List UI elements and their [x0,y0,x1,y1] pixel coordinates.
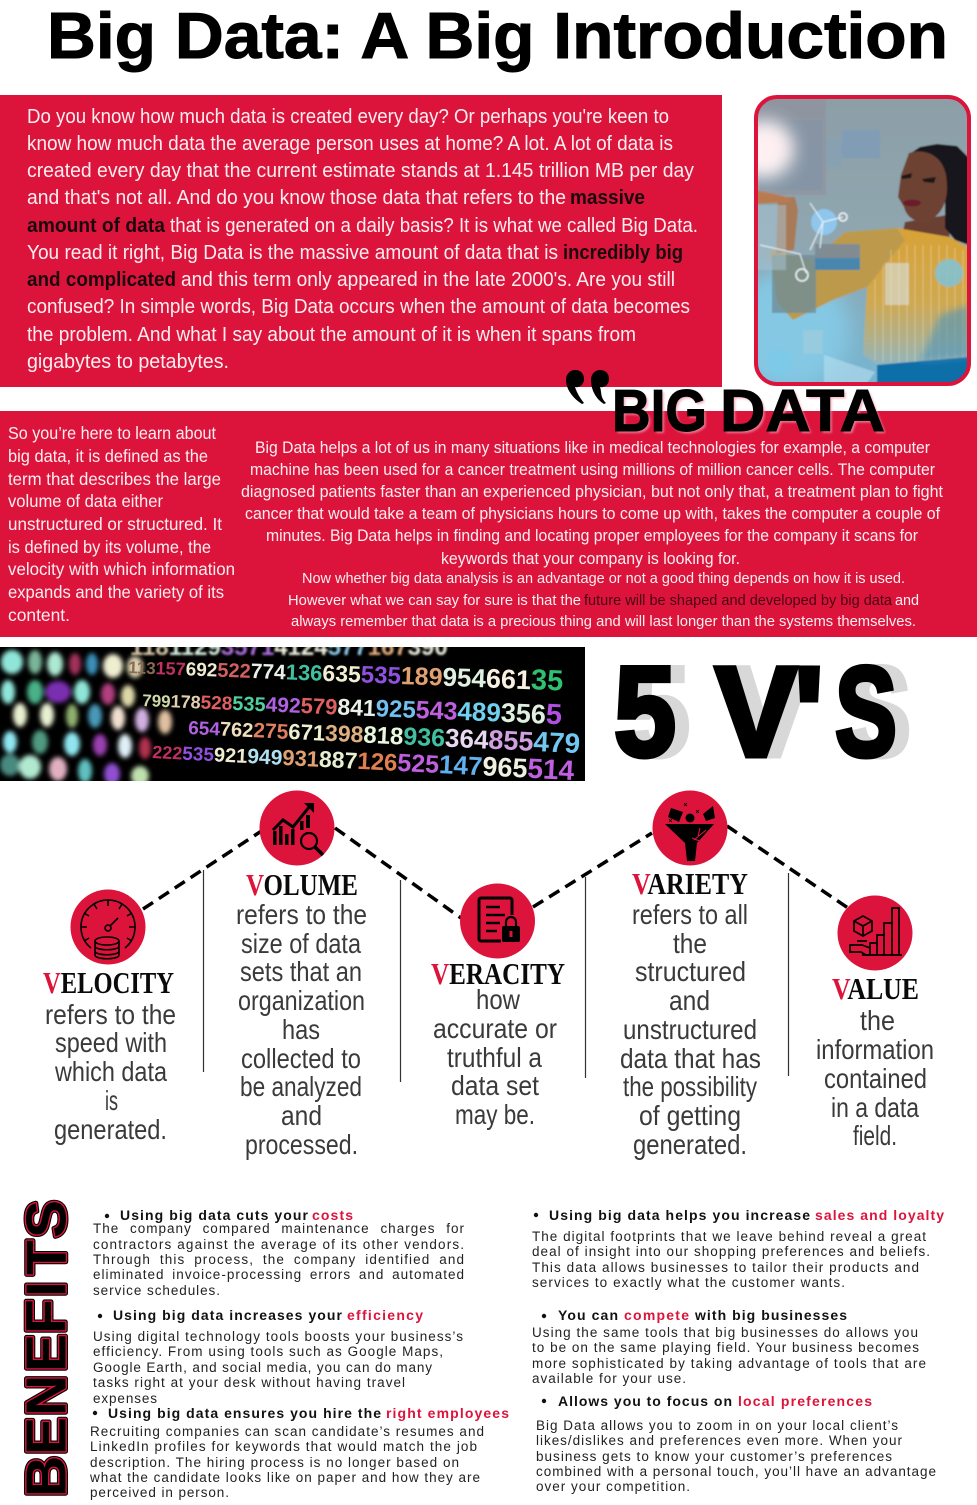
benefit: compete: Using the same tools that big businesses do allows you [532,1325,918,1340]
image: colourful digits on screen: 222535921949931887126525147965514 [152,733,575,786]
icon: quotation marks [566,370,609,404]
variety text: the [673,928,707,959]
benefit: costs: Using big data cuts your [120,1207,309,1223]
benefit: local preferences [536,1393,936,1494]
benefit: costs: service schedules. [93,1283,220,1298]
benefit: efficiency: tasks right at your desk without having travel [93,1375,405,1390]
photo: woman touching holographic data screen [754,95,971,386]
column: velocity [43,890,176,1145]
panel: introduction [0,95,722,387]
veracity text: VERACITY [431,956,565,991]
velocity text: which data [54,1056,167,1087]
benefit: sales and loyalty: This data allows businesses to tailor their products and [532,1260,919,1275]
left definition text: big data, it is defined as the [8,446,208,466]
heading: 5 V'S: S [849,641,911,784]
volume text [236,867,367,1160]
intro text block: the problem. And what I say about the amount of it is when it spans from [27,324,636,346]
dashed connector arrows [143,826,848,918]
benefit: sales and loyalty: The digital footprints that we leave behind reveal a great [532,1229,926,1244]
icon: growth chart and magnifier [260,790,334,866]
woman's sweater [863,228,969,365]
heading: 5 V'S: V [729,641,811,784]
right explanation text: minutes. Big Data helps in finding and locating proper employees for the company it scans for [266,527,918,545]
image: colourful digits on screen: 7991785285354925798419255434893565 [142,681,563,731]
veracity text: truthful a [447,1042,542,1073]
intro text block: and complicated [27,269,176,291]
right explanation text: diagnosed patients faster than an experienced physician, but not only that, a treatment plan to fight [241,483,943,501]
intro text block: You read it right, Big Data is the massive amount of data that is [27,242,558,264]
variety text: data that has [620,1043,761,1074]
heading: 5 V'S: ' [794,641,824,784]
heading: benefits (vertical): BENEFITS [14,1200,78,1497]
benefit: compete [532,1307,926,1386]
left definition text: term that describes the large [8,469,221,489]
variety text: generated. [633,1129,747,1160]
variety text: refers to all [632,899,748,930]
intro text block: know how much data the average person uses at home? A lot. A lot of data is [27,133,673,155]
benefit: costs: contractors against the average of its other vendors. [93,1237,464,1252]
veracity text: data set [451,1070,539,1101]
icon: cube, rising bars and hand [838,896,912,970]
benefit: local preferences: business gets to know your customer’s preferences [536,1449,892,1464]
big data quote heading: BIG [614,380,709,446]
left definition text [8,423,235,625]
velocity text: VELOCITY [43,965,174,1000]
holographic panels [814,243,861,259]
benefit: costs: eliminated invoice-processing errors and automated [93,1267,464,1282]
volume text: and [281,1100,322,1131]
right explanation text: and [895,592,919,609]
volume text: VOLUME [246,867,358,902]
benefit: right employees: LinkedIn profiles for keywords that would match the job [90,1439,477,1454]
benefit: right employees: description. The hiring process is no longer based on [90,1455,459,1470]
benefit: right employees: right employees [386,1405,509,1421]
right explanation text: However what we can say for sure is that the [288,592,581,609]
intro text block: Do you know how much data is created every day? Or perhaps you're keen to [27,106,669,128]
benefit: efficiency: Using digital technology tools boosts your business’s [93,1329,463,1344]
benefit: compete: more sophisticated by taking advantage of tools that are [532,1356,926,1371]
image: colourful digits on screen: 118112935714124577167390 [130,634,448,661]
veracity text: how [476,984,521,1015]
image: colourful digits on screen [0,647,585,781]
icon: data funnel [652,790,728,866]
velocity text: is [105,1085,118,1116]
variety text: and [669,985,710,1016]
benefit: costs [93,1207,464,1298]
benefit: compete: available for your use. [532,1371,686,1386]
left definition text: expands and the variety of its [8,582,224,602]
benefit: right employees: Using big data ensures you hire the [108,1405,381,1421]
benefit: efficiency: efficiency [347,1307,423,1323]
column: value [816,896,934,1151]
intro text block: gigabytes to petabytes. [27,351,229,373]
veracity text: may be. [455,1099,535,1130]
benefit: efficiency [93,1307,463,1406]
benefit: compete: with big businesses [694,1307,847,1323]
big data quote heading: DATA [720,378,885,444]
image: colourful digits on screen: 654762275671398818936364855479 [188,709,581,759]
image: colourful digits on screen: 11315769252277413663553518995466135 [128,648,564,697]
left definition text: volume of data either [8,491,163,511]
benefit: local preferences: likes/dislikes and preferences even more. When your [536,1433,902,1448]
benefit: local preferences: Allows you to focus on [558,1393,732,1409]
intro text block: created every day that the current estimate stands at 1.145 trillion MB per day [27,160,694,182]
benefit: efficiency: Google Earth, and social media, you can do many [93,1360,432,1375]
right explanation text [241,439,943,630]
benefit: local preferences: over your competition. [536,1479,690,1494]
intro text block: incredibly big [563,242,683,264]
volume text: refers to the [236,899,367,930]
heading: benefits (vertical): BENEFITS [14,1200,78,1497]
benefit: efficiency: Using big data increases your [113,1307,343,1323]
icon: document with padlock [460,884,535,958]
left definition text: is defined by its volume, the [8,537,211,557]
right explanation text: future will be shaped and developed by big data [584,592,893,609]
intro text block [27,106,698,373]
intro text block: confused? In simple words, Big Data occurs when the amount of data becomes [27,296,690,318]
trousers [876,356,967,382]
volume text: sets that an [240,956,362,987]
benefit: sales and loyalty: sales and loyalty [815,1207,944,1223]
velocity text [43,965,176,1145]
benefit: compete: You can [558,1307,618,1323]
value text: contained [824,1063,927,1094]
big data quote heading: DATA [722,380,887,446]
column: volume [236,790,367,1160]
intro text block: and that's not all. And do you know those data that refers to the [27,187,566,209]
benefit: local preferences: local preferences [738,1393,872,1409]
benefit: costs: The company compared maintenance charges for [93,1221,464,1236]
panel: big data band [0,411,977,637]
variety text [620,866,761,1160]
heading: 5 V'S: V [715,641,797,784]
benefit: right employees: Recruiting companies can scan candidate’s resumes and [90,1424,484,1439]
right explanation text: Big Data helps a lot of us in many situations like in medical technologies for example, a computer [255,439,930,457]
value text [816,971,934,1151]
title: Big Data: A Big Introduction [47,0,948,72]
left definition text: velocity with which information [8,559,235,579]
volume text: has [282,1014,320,1045]
heading: 5 V'S [614,641,911,784]
right explanation text: keywords that your company is looking for. [441,550,740,568]
heading: 5 V'S: S [835,641,897,784]
volume text: processed. [245,1129,358,1160]
vertical dividers [204,870,788,1082]
velocity text: generated. [54,1114,167,1145]
right explanation text: Now whether big data analysis is an advantage or not a good thing depends on how it is used. [302,570,905,587]
big data quote heading [566,370,887,446]
benefit: efficiency: efficiency. From using tools such as Google Maps, [93,1344,443,1359]
veracity text: accurate or [433,1013,557,1044]
woman's hair [908,144,969,245]
column: variety [620,790,761,1160]
veracity text [431,956,565,1130]
benefit: compete: compete [624,1307,689,1323]
velocity text: refers to the [45,999,176,1030]
benefit: local preferences: Big Data allows you to zoom in on your local client’s [536,1418,898,1433]
left definition text: content. [8,605,70,625]
benefit: sales and loyalty [532,1207,944,1290]
column: veracity [431,884,565,1130]
value text: the [860,1005,895,1036]
variety text: the possibility [623,1071,757,1102]
right explanation text: cancer that would take a team of physicians hours to come up with, takes the computer a couple of [245,505,940,523]
benefit: right employees [89,1405,509,1500]
value text: information [816,1034,934,1065]
benefit: right employees: perceived in person. [90,1485,229,1500]
left definition text: So you’re here to learn about [8,423,216,443]
benefit: local preferences: combined with a personal touch, you’ll have an advantage [536,1464,936,1479]
volume text: collected to [241,1043,361,1074]
icon: speedometer and database [70,890,146,964]
big data quote heading: BIG [612,378,707,444]
value text: field. [853,1120,897,1151]
right explanation text: machine has been used for a cancer treatment using millions of million cancer cells. The computer [250,461,935,479]
right explanation text: always remember that data is a precious thing and will last longer than the systems themselves. [291,613,916,630]
heading: benefits (vertical): BENEFITS [14,1200,78,1497]
variety text: structured [635,956,746,987]
benefit: sales and loyalty: services to exactly what the customer wants. [532,1275,845,1290]
intro text block: and this term only appeared in the late 2000's. Are you still [181,269,675,291]
volume text: be analyzed [240,1071,362,1102]
intro text block: massive [570,187,645,209]
benefit: sales and loyalty: Using big data helps you increase [549,1207,810,1223]
benefit: efficiency: expenses [93,1391,157,1406]
left definition text: unstructured or structured. It [8,514,222,534]
intro text block: that is generated on a daily basis? It is what we called Big Data. [170,215,698,237]
variety text: unstructured [623,1014,757,1045]
heading: 5 V'S: 5 [628,641,690,784]
benefit: costs: Through this process, the company identified and [93,1252,464,1267]
benefit: sales and loyalty: deal of insight into our shopping preferences and beliefs. [532,1244,930,1259]
variety text: VARIETY [632,866,748,901]
benefit: compete: to be on the same playing field. Your business becomes [532,1340,919,1355]
variety text: of getting [639,1100,741,1131]
intro text block: amount of data [27,215,166,237]
woman's face [898,151,947,222]
benefit: right employees: what the candidate looks like on paper and how they are [89,1470,480,1485]
value text: VALUE [832,971,919,1006]
volume text: size of data [241,928,361,959]
heading: 5 V'S: 5 [614,641,676,784]
benefit: costs: costs [312,1207,353,1223]
value text: in a data [831,1092,919,1123]
volume text: organization [238,985,365,1016]
velocity text: speed with [55,1027,167,1058]
